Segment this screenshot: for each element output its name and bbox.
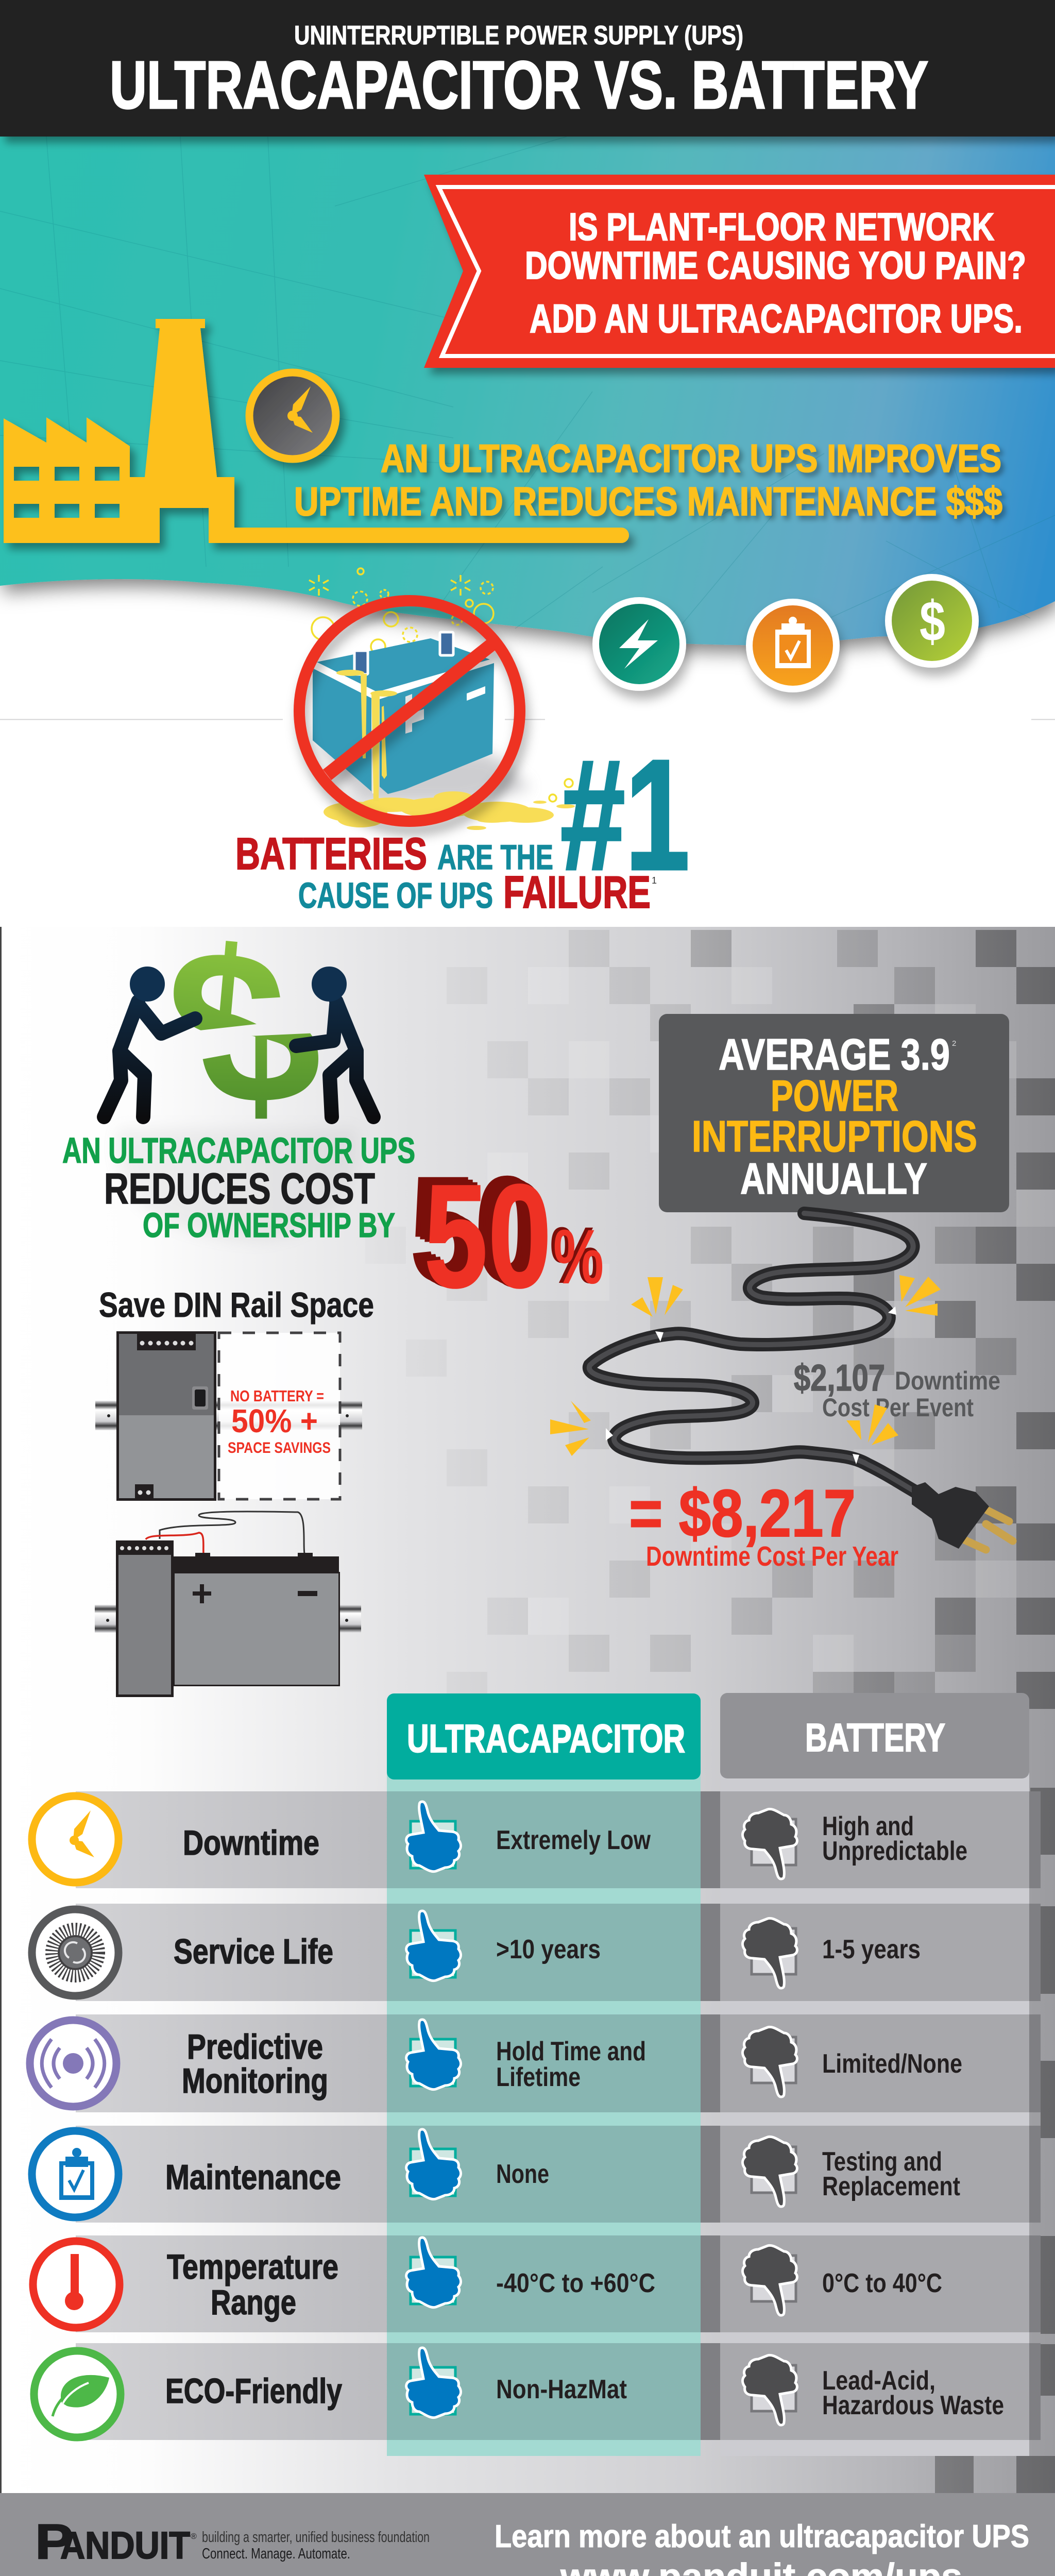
thumb up: [406, 2129, 461, 2199]
panel: comparison table: [30, 1693, 1041, 2456]
icon: sunburst dial: [32, 1909, 118, 1996]
red ribbon banner: [424, 175, 1055, 368]
icon: dollar badge: $: [920, 590, 945, 653]
row label: Temperature: [167, 2247, 338, 2286]
battery column header: BATTERY: [805, 1716, 945, 1760]
#1 cause text block: [235, 727, 690, 918]
illustration: power cord with plug: [589, 1213, 1013, 1550]
battery value: Testing and: [822, 2147, 942, 2177]
ultracapacitor value: Non-HazMat: [496, 2375, 627, 2404]
row: predictive monitoring: [30, 2020, 962, 2107]
row label: Predictive: [187, 2027, 323, 2066]
ultracapacitor value: Extremely Low: [496, 1825, 651, 1855]
downtime cost per year: [629, 1476, 898, 1572]
50% plus: 50% +: [231, 1402, 318, 1439]
icon: leaf: [34, 2351, 121, 2437]
row label: [182, 2027, 328, 2100]
ultracapacitor value: -40°C to +60°C: [496, 2268, 655, 2298]
failure word: FAILURE: [503, 867, 651, 918]
3D 50 percent figure: %: [551, 1212, 601, 1298]
space savings: SPACE SAVINGS: [228, 1439, 331, 1456]
icon: lightning bolt badge: [592, 597, 686, 691]
3D 50 percent figure: 50: [424, 1154, 552, 1318]
yellow claim text: [294, 437, 1002, 524]
cost per event amount: $2,107: [794, 1358, 885, 1399]
acid drips: [336, 670, 397, 801]
dollar sign torn in two: $: [152, 901, 295, 1154]
right stick figure: [296, 974, 373, 1117]
battery value: Hazardous Waste: [822, 2391, 1004, 2420]
ultracapacitor value: Lifetime: [496, 2062, 581, 2092]
slogan: Connect. Manage. Automate.: [202, 2546, 350, 2562]
icon: clipboard: [32, 2131, 118, 2217]
illustration: leaking battery with prohibition sign: [299, 568, 575, 830]
battery value: High and: [822, 1811, 914, 1841]
battery value: [822, 2366, 1004, 2420]
row label: Monitoring: [182, 2061, 328, 2100]
logo: Panduit wordmark: P: [35, 2514, 73, 2569]
logo: Panduit wordmark: [35, 2514, 190, 2569]
battery value: Lead-Acid,: [822, 2366, 935, 2396]
thumb up: [406, 1911, 461, 1981]
faint reflection under figures: [116, 1128, 357, 1242]
panel: header bar: [0, 0, 1055, 137]
battery value: 0°C to 40°C: [822, 2268, 942, 2298]
figures tearing a dollar sign: [104, 901, 373, 1242]
battery value: Limited/None: [822, 2049, 962, 2079]
battery value: Replacement: [822, 2172, 960, 2201]
icon: clock: [249, 372, 336, 459]
thumb up: [406, 2020, 461, 2090]
thumb down: [743, 2355, 797, 2425]
black line 2: REDUCES COST: [104, 1164, 375, 1213]
diagram: battery UPS on DIN rail: [95, 1512, 361, 1696]
row label: ECO-Friendly: [165, 2371, 342, 2411]
thumb down: [743, 2137, 797, 2207]
row: maintenance: [32, 2129, 960, 2217]
panel: teal hero background: [0, 137, 1055, 646]
big number one: #1: [560, 727, 690, 903]
battery value: Unpredictable: [822, 1836, 967, 1866]
row: downtime: [32, 1796, 967, 1883]
downtime per event text: [794, 1358, 1000, 1422]
downtime: Downtime: [895, 1366, 1000, 1395]
battery value: [822, 2147, 960, 2201]
batteries word: BATTERIES: [235, 829, 427, 879]
row label: Service Life: [174, 1932, 333, 1971]
battery value: [822, 1811, 967, 1866]
panel: gray checker background: [0, 927, 1055, 2493]
ultracapacitor value: >10 years: [496, 1935, 601, 1964]
icon: clipboard badge: [746, 599, 840, 692]
diagram: ultracapacitor UPS on DIN rail: [95, 1332, 362, 1499]
footnote marker 1: 1: [652, 875, 657, 886]
callout: power interruptions box: [659, 1014, 1009, 1212]
thumb up: [406, 1802, 461, 1872]
annually: ANNUALLY: [740, 1155, 927, 1204]
thumb up: [406, 2348, 461, 2418]
3D 50 percent figure: 50: [420, 1151, 549, 1316]
cost reduction text: [62, 1130, 415, 1245]
thumb down: [743, 1809, 797, 1879]
dashed empty space box: [219, 1333, 340, 1499]
battery column: [720, 1693, 1029, 2456]
row: service life: [32, 1909, 921, 1996]
panel: footer: [0, 2493, 1055, 2576]
thumb up: [406, 2238, 461, 2308]
footnote marker 2: 2: [952, 1039, 956, 1048]
3D 50 percent figure: %: [553, 1213, 604, 1300]
average: AVERAGE 3.9: [719, 1030, 950, 1079]
battery value: 1-5 years: [822, 1935, 921, 1964]
yearly caption: Downtime Cost Per Year: [646, 1541, 898, 1572]
icon: dollar badge: [885, 574, 979, 668]
ultracapacitor column: [387, 1693, 701, 2456]
heading: save DIN rail space: Save DIN Rail Space: [99, 1285, 374, 1325]
ultracapacitor value: [496, 2037, 646, 2092]
row bands: [76, 1791, 387, 2440]
dollar sign torn in two: $: [200, 905, 321, 1149]
row label: [167, 2247, 338, 2322]
green line 3: OF OWNERSHIP BY: [143, 1206, 395, 1245]
dollar sign torn in two: [174, 941, 318, 1119]
row label: Maintenance: [165, 2158, 341, 2197]
cost per event: Cost Per Event: [822, 1393, 974, 1422]
thumb down: [743, 2027, 797, 2097]
are the: ARE THE: [437, 838, 553, 877]
icon: yellow spark bursts on cord: [550, 1275, 941, 1456]
header kicker: UNINTERRUPTIBLE POWER SUPPLY (UPS): [294, 21, 743, 50]
acid bubbles and sparks: [309, 568, 573, 802]
icon: signal waves: [30, 2020, 116, 2107]
cause of UPS: CAUSE OF UPS: [298, 875, 493, 916]
yearly amount: = $8,217: [629, 1476, 856, 1551]
icon: thermometer: [33, 2241, 120, 2328]
power: POWER: [771, 1072, 898, 1121]
ultracapacitor value: None: [496, 2159, 549, 2189]
icon: factory with pipe: [4, 319, 629, 543]
3D 50 percent figure: 50: [415, 1149, 544, 1314]
gutter bands: [701, 1791, 1041, 2440]
icon: clock: [32, 1796, 118, 1883]
row: temperature range: [33, 2238, 942, 2328]
ultracapacitor column header: ULTRACAPACITOR: [407, 1717, 685, 1761]
battery body: [313, 632, 494, 794]
no battery note: NO BATTERY =: [230, 1387, 324, 1405]
thumb down: [743, 2245, 797, 2315]
logo: Panduit wordmark: ANDUIT: [60, 2524, 190, 2567]
row: eco-friendly: [34, 2348, 1004, 2437]
3D 50 percent figure: 50: [411, 1146, 539, 1311]
ultracapacitor value: Hold Time and: [496, 2037, 646, 2066]
prohibition sign: [299, 601, 520, 821]
left stick figure: [104, 974, 195, 1117]
row label: Range: [211, 2283, 296, 2322]
acid puddle: [324, 791, 575, 830]
thumb down: [743, 1918, 797, 1988]
row label: Downtime: [183, 1823, 319, 1862]
tagline: building a smarter, unified business foundation: [202, 2529, 430, 2546]
interruptions: INTERRUPTIONS: [692, 1112, 977, 1161]
battery floor shadow: [313, 740, 531, 804]
icon: spark burst over text: [846, 1404, 898, 1445]
registered mark: ®: [191, 2532, 197, 2541]
green line 1: AN ULTRACAPACITOR UPS: [62, 1130, 415, 1171]
